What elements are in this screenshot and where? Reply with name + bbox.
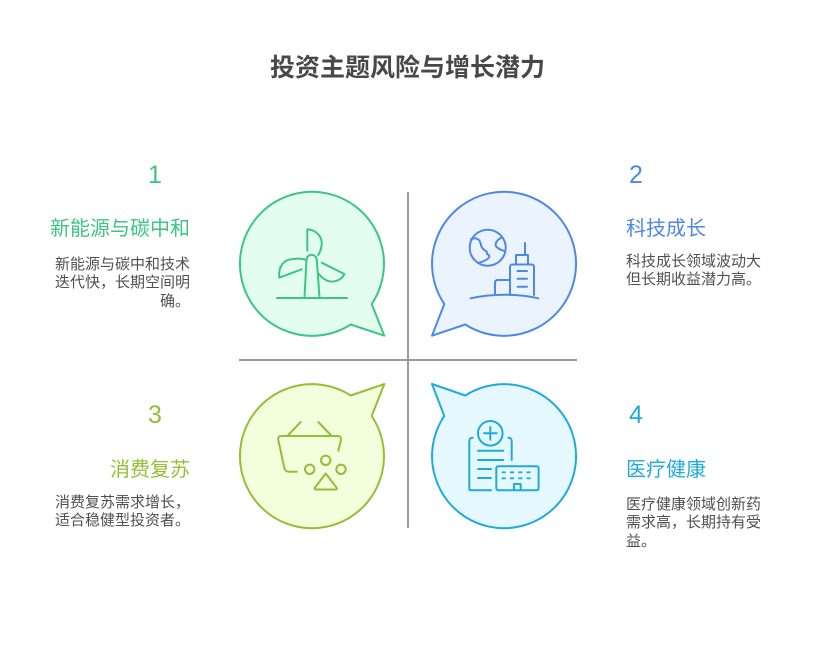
icon: wind turbine [277, 229, 347, 298]
number 4: 4 [629, 401, 643, 429]
title: 投资主题风险与增长潜力 [270, 54, 545, 82]
text block: technology growth: 但长期收益潜力高。 [626, 271, 761, 288]
heading: new energy: 新能源与碳中和 [50, 217, 190, 240]
text block: healthcare: 医疗健康领域创新药 [626, 496, 761, 513]
text block: technology growth [626, 253, 761, 288]
number 2: 2 [629, 161, 643, 189]
speech bubble: cyan [432, 384, 576, 528]
text block: new energy: 迭代快，长期空间明 [55, 274, 190, 291]
speech bubble: blue [432, 192, 576, 336]
panel: consumer recovery [55, 384, 384, 529]
text block: consumer recovery: 消费复苏需求增长， [55, 493, 190, 511]
text block: technology growth: 科技成长领域波动大 [626, 253, 761, 270]
text block: healthcare: 益。 [626, 533, 656, 550]
heading: healthcare: 医疗健康 [626, 458, 706, 481]
icon: globe and city [470, 230, 538, 298]
text block: consumer recovery [55, 493, 190, 529]
text block: consumer recovery: 适合稳健型投资者。 [55, 512, 190, 529]
speech bubble: green [240, 192, 384, 336]
heading: technology growth: 科技成长 [626, 217, 706, 240]
text block: healthcare: 需求高，长期持有受 [626, 514, 761, 531]
text block: new energy: 新能源与碳中和技术 [55, 256, 190, 273]
panel: new energy [50, 161, 384, 336]
text block: healthcare [626, 496, 761, 550]
speech bubble: olive [240, 384, 384, 528]
text block: new energy: 确。 [160, 293, 190, 310]
number 3: 3 [148, 401, 162, 429]
text block: new energy [55, 256, 190, 310]
number 1: 1 [148, 161, 162, 189]
panel: healthcare [432, 384, 761, 550]
icon: hospital records [469, 421, 539, 490]
panel: technology growth [432, 161, 761, 336]
heading: consumer recovery: 消费复苏 [110, 458, 190, 481]
icon: shopping basket [278, 422, 346, 490]
